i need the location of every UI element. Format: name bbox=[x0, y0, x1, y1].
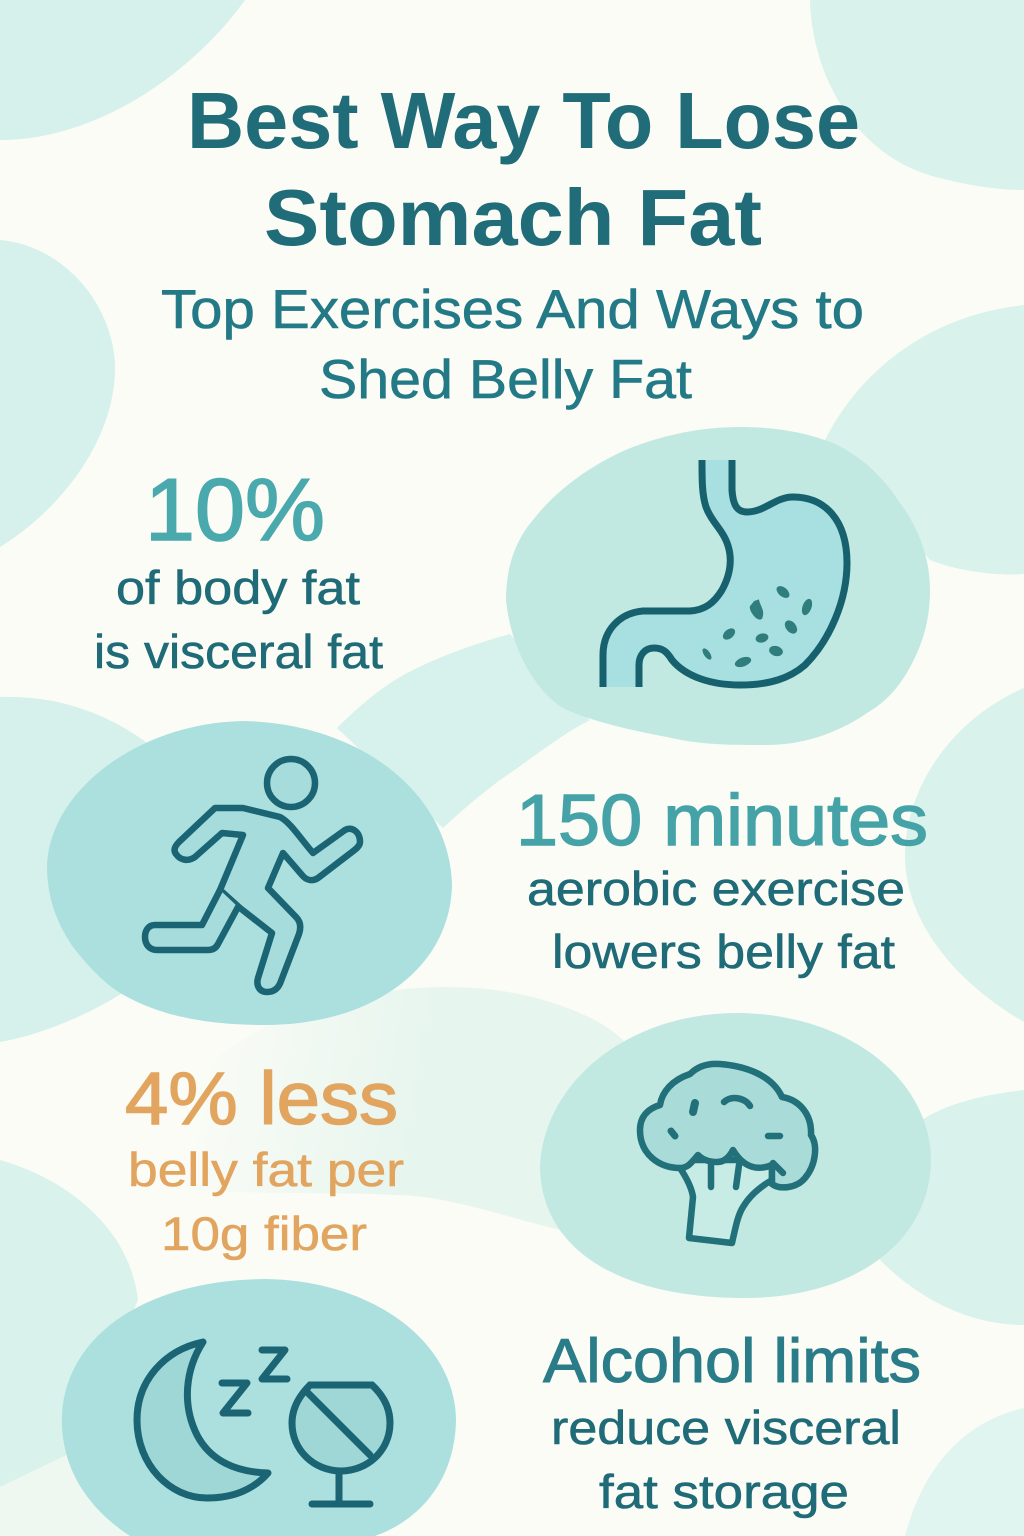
text: belly fat per 10g fiber bbox=[128, 1143, 404, 1260]
blob: runner background bbox=[47, 721, 452, 1025]
title: Stomach Fat bbox=[264, 173, 762, 262]
panel: alcohol stat bbox=[543, 1327, 921, 1518]
text: of body fat is visceral fat bbox=[94, 561, 383, 678]
stat: Alcohol limits: Alcohol limits bbox=[543, 1327, 921, 1396]
icon: sleep z letters bbox=[222, 1350, 287, 1413]
subtitle: Top Exercises And Ways to bbox=[161, 278, 864, 340]
blob: sleep background bbox=[62, 1279, 456, 1536]
text: reduce visceral fat storage: fat storage bbox=[599, 1465, 849, 1518]
text: aerobic exercise lowers belly fat: lowers belly fat bbox=[552, 925, 895, 978]
icon: crescent moon bbox=[137, 1342, 268, 1498]
title bbox=[187, 76, 860, 262]
text: reduce visceral fat storage bbox=[551, 1401, 901, 1518]
subtitle bbox=[161, 278, 864, 410]
text: of body fat is visceral fat: of body fat bbox=[116, 561, 360, 614]
title: Best Way To Lose bbox=[187, 76, 860, 165]
stat: 4% less: 4% less bbox=[125, 1057, 398, 1140]
icon: broccoli bbox=[640, 1064, 815, 1243]
icon: stomach bbox=[603, 460, 847, 687]
text: aerobic exercise lowers belly fat bbox=[527, 862, 905, 978]
text: belly fat per 10g fiber: belly fat per bbox=[128, 1143, 404, 1196]
panel: stomach illustration bbox=[506, 427, 930, 745]
icon: crossed-out wine glass bbox=[292, 1385, 390, 1504]
panel: sleep and alcohol illustration bbox=[62, 1279, 456, 1536]
panel: visceral fat stat bbox=[94, 460, 383, 678]
stat: 150 minutes: 150 minutes bbox=[516, 781, 928, 861]
panel: runner illustration bbox=[47, 721, 452, 1025]
text: reduce visceral fat storage: reduce visceral bbox=[551, 1401, 901, 1454]
text: of body fat is visceral fat: is visceral fat bbox=[94, 625, 383, 678]
stat: 10%: 10% bbox=[145, 460, 325, 559]
icon: running person bbox=[145, 759, 360, 992]
icon detail: fat deposits bbox=[701, 584, 814, 669]
panel: fiber stat bbox=[125, 1057, 404, 1260]
blob: broccoli background bbox=[540, 1013, 931, 1298]
panel: aerobic exercise stat bbox=[516, 781, 928, 978]
text: belly fat per 10g fiber: 10g fiber bbox=[161, 1207, 367, 1260]
subtitle: Shed Belly Fat bbox=[319, 348, 692, 410]
blob: stomach background bbox=[506, 427, 930, 745]
text: aerobic exercise lowers belly fat: aerobic exercise bbox=[527, 862, 905, 915]
panel: broccoli illustration bbox=[540, 1013, 931, 1298]
